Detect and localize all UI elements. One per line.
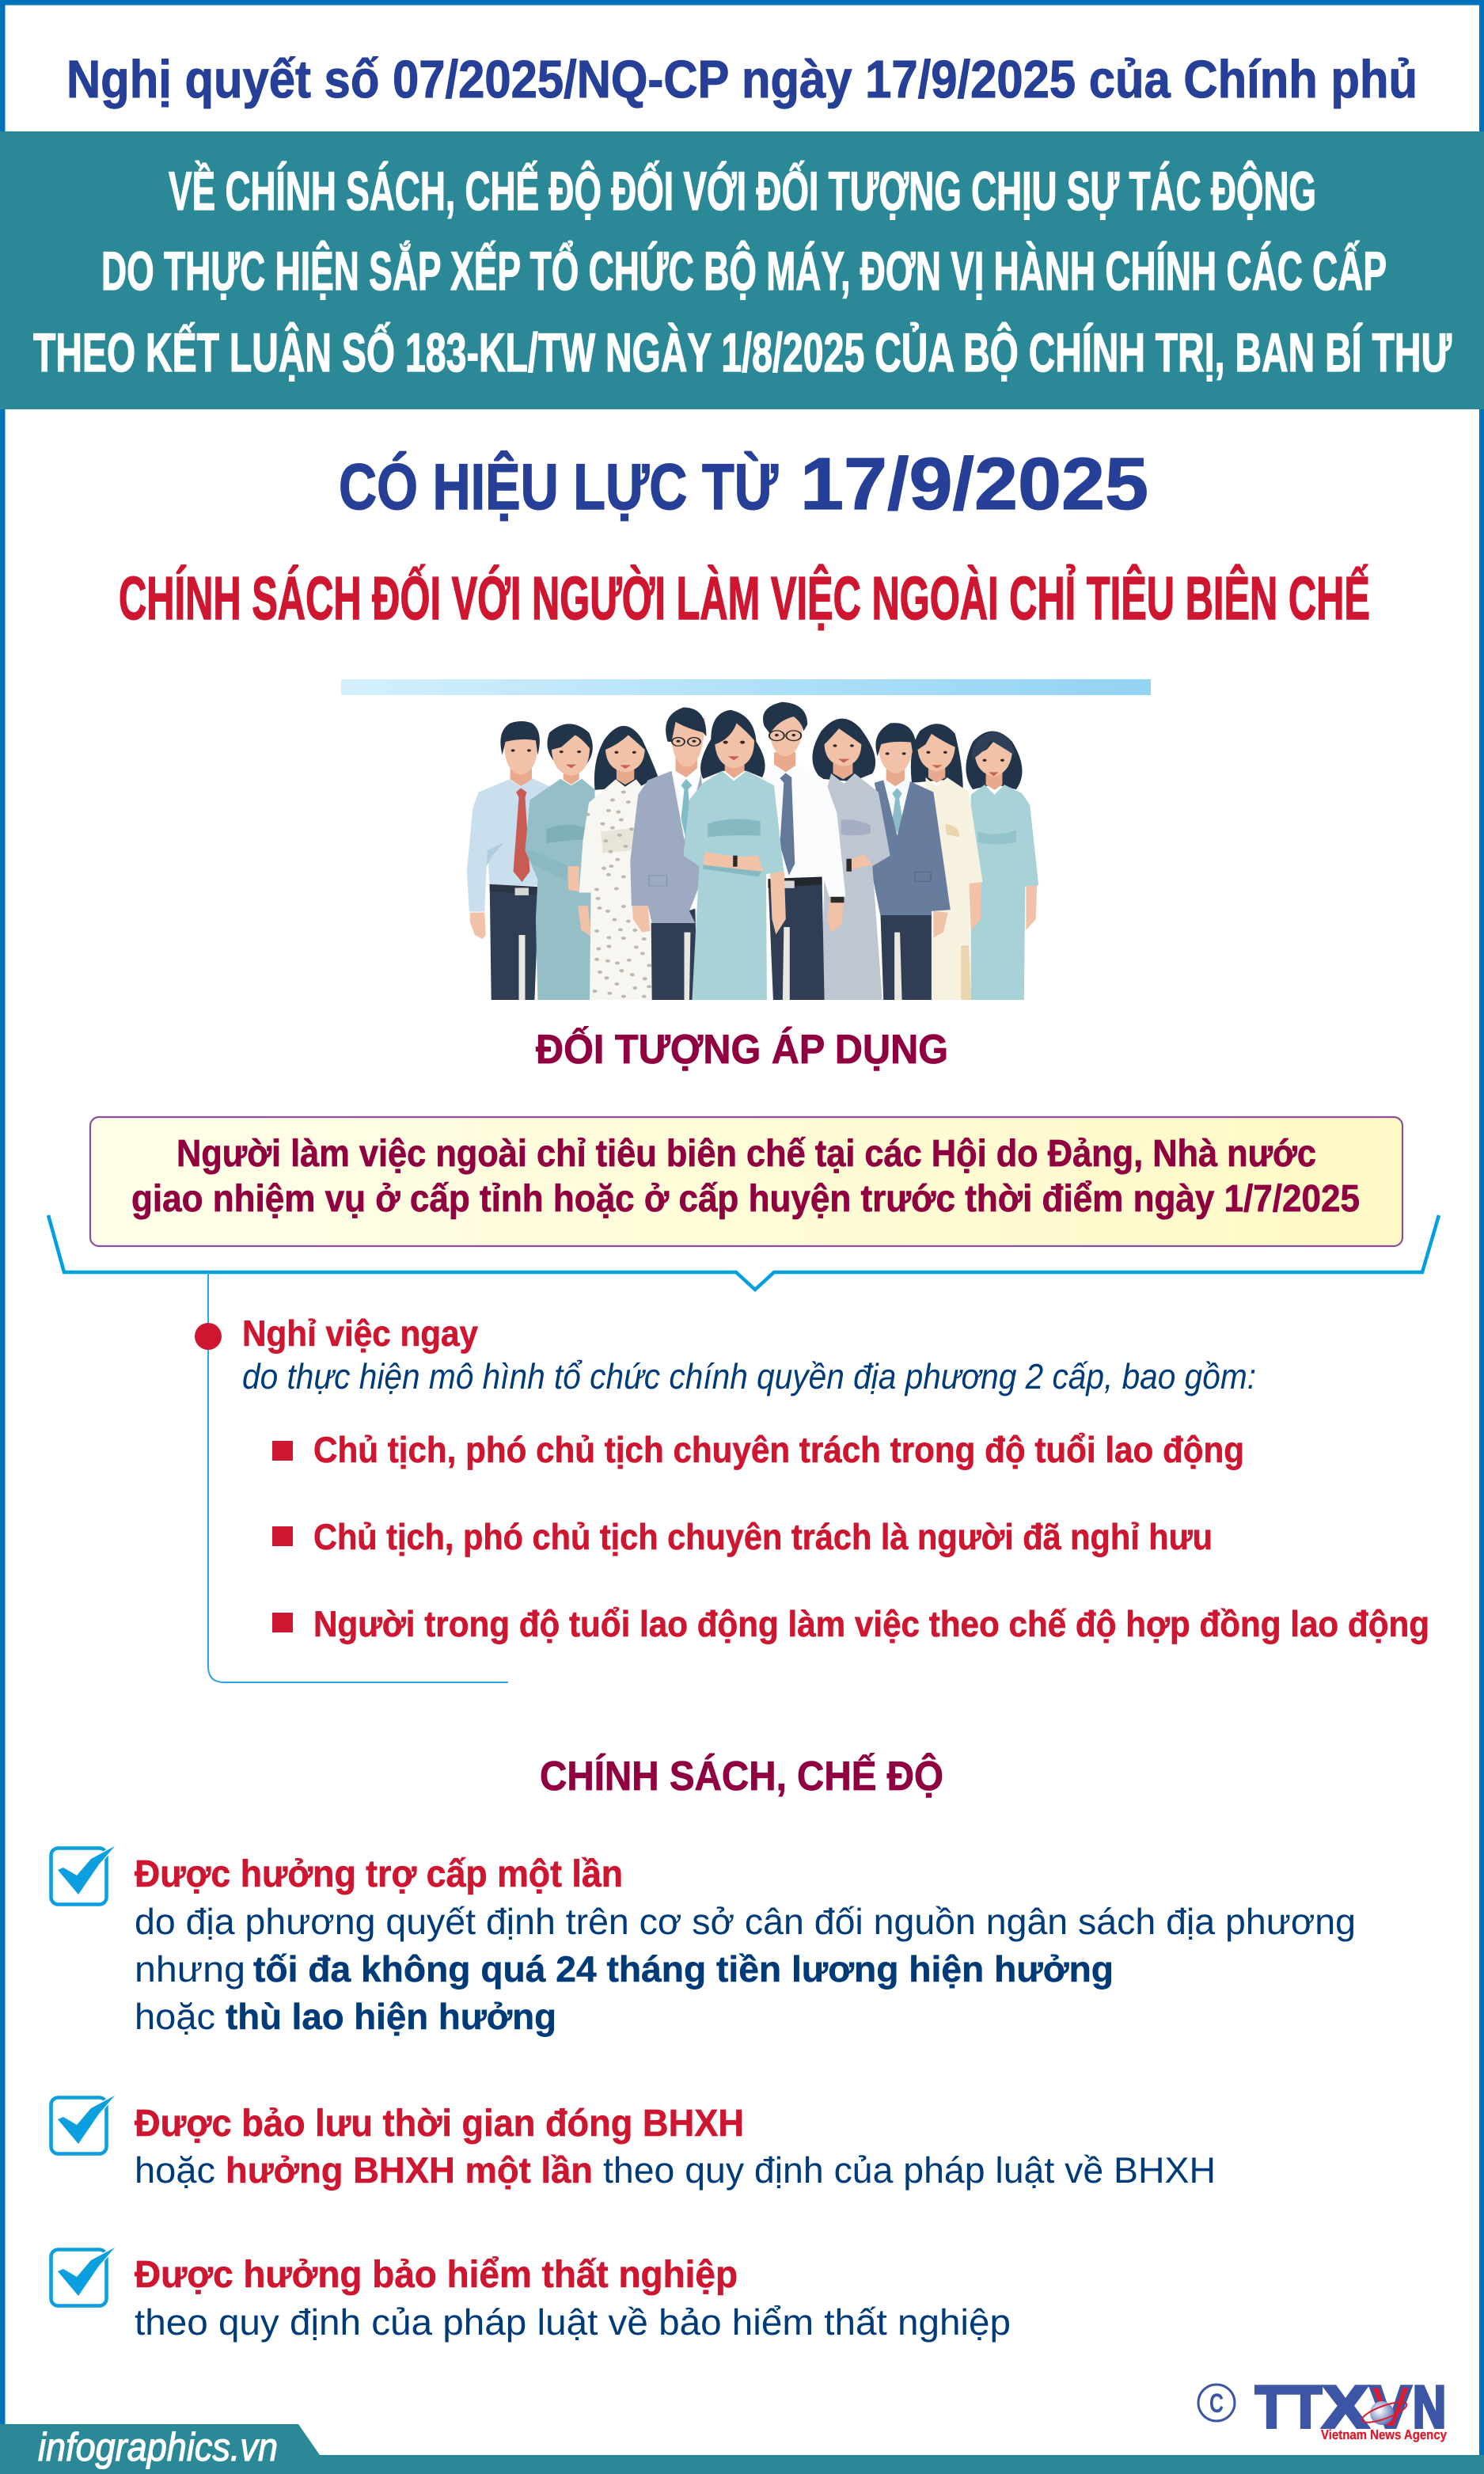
person 6: man in white shirt with glasses: [758, 702, 845, 1000]
policy 1: one-time allowance: [51, 1846, 1356, 2037]
person 1: man in light shirt with red tie: [467, 721, 550, 1000]
policy 2: social insurance reservation: hưởng BHXH một lần: [226, 2149, 593, 2191]
policy 3: unemployment insurance: Được hưởng bảo hiểm thất nghiệp: [135, 2254, 738, 2296]
heading band: subject of the resolution: [0, 131, 1484, 409]
bullet dot: [195, 1323, 222, 1350]
sub-item 1: Chủ tịch, phó chủ tịch chuyên trách trong độ tuổi lao động: [313, 1429, 1244, 1470]
policy 2: social insurance reservation: [51, 2096, 1216, 2191]
policy 1: one-time allowance: do địa phương quyết định trên cơ sở cân đối nguồn ngân sách địa phương: [135, 1901, 1356, 1942]
timeline line: [208, 1272, 508, 1682]
wordmark: V: [1370, 2373, 1411, 2440]
effective date: [339, 443, 1148, 525]
person 2: woman in darker teal ao dai: [525, 724, 595, 1000]
policy 3: unemployment insurance: theo quy định của pháp luật về bảo hiểm thất nghiệp: [135, 2301, 1011, 2343]
person 8: man in blue suit: [871, 723, 951, 1000]
copyright mark: C: [1209, 2388, 1224, 2419]
list: immediate resignation: [195, 1272, 1429, 1682]
person 3: woman in white dotted ao dai: [578, 726, 658, 1000]
policy 2: social insurance reservation: Được bảo lưu thời gian đóng BHXH: [135, 2103, 744, 2145]
item heading: Nghỉ việc ngay: [242, 1313, 478, 1354]
copyright mark: [1198, 2385, 1235, 2421]
callout: applicable subjects description: [90, 1117, 1402, 1246]
effective date: CÓ HIỆU LỰC TỪ: [339, 450, 779, 523]
icon: checkbox: [51, 1846, 115, 1905]
policy 3: unemployment insurance: [51, 2248, 1011, 2343]
policy 1: one-time allowance: thù lao hiện hưởng: [226, 1996, 556, 2037]
wordmark: [1255, 2373, 1446, 2440]
effective date: 17/9/2025: [800, 443, 1148, 525]
person 5: woman in light teal ao dai at centre: [683, 710, 786, 1000]
policy 1: one-time allowance: hoặc: [135, 1996, 215, 2037]
wordmark: T: [1289, 2373, 1322, 2440]
globe: [1370, 2401, 1394, 2425]
callout: applicable subjects description: giao nhiệm vụ ở cấp tỉnh hoặc ở cấp huyện trước thời điểm ngày 1/7/2025: [131, 1178, 1360, 1220]
logo: TTXVN Vietnam News Agency: Vietnam News Agency: [1321, 2427, 1447, 2442]
heading: applicable subjects: ĐỐI TƯỢNG ÁP DỤNG: [536, 1026, 948, 1073]
wordmark: N: [1413, 2373, 1446, 2440]
policy 1: one-time allowance: tối đa không quá 24 tháng tiền lương hiện hưởng: [253, 1948, 1114, 1989]
wordmark: X: [1323, 2373, 1368, 2440]
policy 1: one-time allowance: Được hưởng trợ cấp một lần: [135, 1853, 623, 1895]
person 7: woman in grey ao dai: [812, 719, 890, 1000]
bracket with pointer under callout: [48, 1215, 1439, 1290]
icon: checkbox: [51, 2096, 115, 2153]
person 9: woman in cream ao dai: [911, 724, 983, 1000]
logo: TTXVN Vietnam News Agency: [1198, 2373, 1447, 2442]
footer band with source: [0, 2424, 1484, 2474]
callout: applicable subjects description: Người làm việc ngoài chỉ tiêu biên chế tại các Hội do Đảng, Nhà nước: [176, 1133, 1316, 1175]
footer band with source: infographics.vn: [38, 2425, 278, 2469]
icon: checkbox: [51, 2248, 115, 2305]
illustration: group of ten workers: [467, 702, 1038, 1000]
policy 2: social insurance reservation: theo quy định của pháp luật về BHXH: [603, 2149, 1216, 2191]
heading: policies and regimes: CHÍNH SÁCH, CHẾ ĐỘ: [540, 1753, 943, 1799]
policy 2: social insurance reservation: hoặc: [135, 2149, 215, 2191]
gradient bar above illustration: [341, 679, 1151, 695]
item description: do thực hiện mô hình tổ chức chính quyền địa phương 2 cấp, bao gồm:: [242, 1356, 1256, 1397]
wordmark: T: [1255, 2373, 1288, 2440]
sub-item 2: Chủ tịch, phó chủ tịch chuyên trách là người đã nghỉ hưu: [313, 1516, 1213, 1557]
policy 1: one-time allowance: nhưng: [135, 1948, 245, 1989]
person 10: woman in teal ao dai: [966, 732, 1038, 1000]
person 4: man in grey suit with glasses: [630, 707, 707, 1000]
